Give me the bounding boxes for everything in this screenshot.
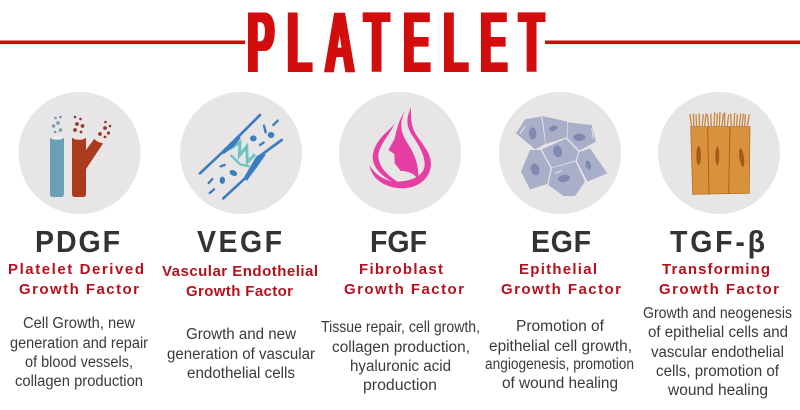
- panel: FGF: [321, 92, 480, 394]
- description: Growth and new: [186, 326, 297, 343]
- description: collagen production,: [332, 339, 470, 356]
- full name: Growth Factor: [501, 281, 621, 298]
- description: [485, 318, 634, 392]
- description: generation of vascular: [167, 346, 315, 363]
- full name: [501, 261, 621, 298]
- full name: Growth Factor: [659, 281, 779, 298]
- description: epithelial cell growth,: [489, 338, 632, 355]
- panel: PDGF: [8, 92, 148, 390]
- description: collagen production: [15, 373, 143, 390]
- full name: Growth Factor: [344, 281, 464, 298]
- full name: Growth Factor: [19, 281, 139, 298]
- full name: Platelet Derived: [8, 261, 144, 278]
- description: [321, 319, 480, 394]
- description: [10, 315, 148, 390]
- full name: [659, 261, 779, 298]
- full name: [8, 261, 144, 298]
- description: vascular endothelial: [651, 344, 784, 361]
- description: endothelial cells: [187, 365, 295, 382]
- acronym: VEGF: [197, 225, 282, 259]
- description: production: [363, 377, 437, 394]
- description: [167, 326, 315, 382]
- icon: vascular vessel: [180, 92, 302, 214]
- description: generation and repair: [10, 335, 148, 352]
- acronym: EGF: [531, 225, 591, 259]
- icon: blood vessels: [18, 92, 140, 214]
- description: Tissue repair, cell growth,: [321, 319, 480, 336]
- acronym: FGF: [370, 225, 427, 259]
- panel: EGF: [485, 92, 634, 392]
- description: Promotion of: [516, 318, 605, 335]
- full name: Epithelial: [519, 261, 597, 278]
- icon: epithelial cells: [499, 92, 621, 214]
- acronym: TGF-β: [670, 225, 765, 259]
- panel: TGF-beta: [643, 92, 792, 399]
- full name: Growth Factor: [186, 283, 293, 300]
- full name: Fibroblast: [359, 261, 443, 278]
- description: [643, 305, 792, 399]
- icon: columnar epithelium: [658, 92, 780, 214]
- full name: [162, 263, 318, 300]
- panel: VEGF: [162, 92, 318, 382]
- full name: [344, 261, 464, 298]
- full name: Vascular Endothelial: [162, 263, 318, 280]
- title with side rules: [0, 0, 800, 91]
- description: of wound healing: [502, 375, 618, 392]
- icon: face in drop: [339, 92, 461, 214]
- description: of blood vessels,: [25, 354, 133, 371]
- description: of epithelial cells and: [648, 324, 788, 341]
- description: Cell Growth, new: [23, 315, 136, 332]
- full name: Transforming: [662, 261, 770, 278]
- description: wound healing: [667, 382, 768, 399]
- description: cells, promotion of: [656, 363, 780, 380]
- description: hyaluronic acid: [350, 358, 451, 375]
- acronym: PDGF: [35, 225, 120, 259]
- description: angiogenesis, promotion: [485, 356, 634, 373]
